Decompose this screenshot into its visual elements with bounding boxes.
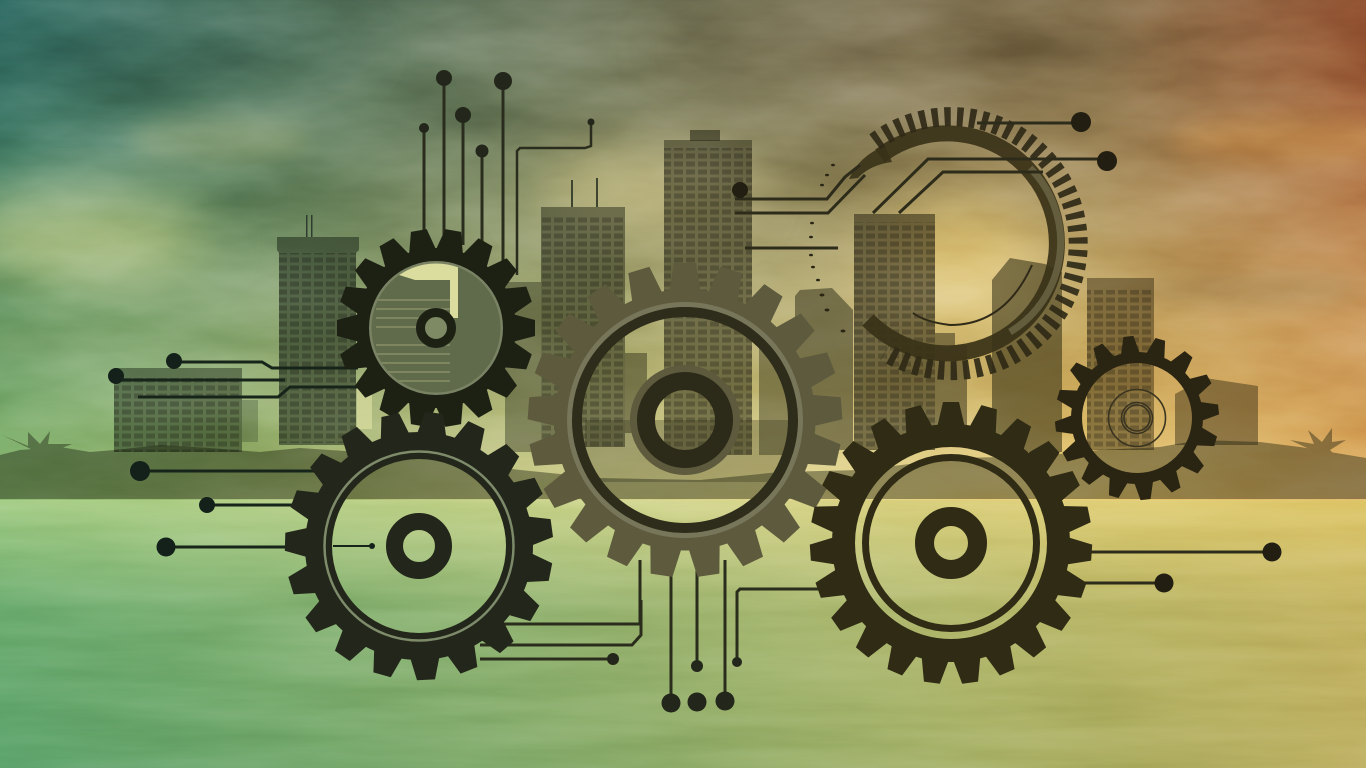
clouds	[0, 0, 1366, 500]
circuit lines: bottom	[480, 560, 840, 703]
lens	[370, 262, 502, 394]
gear	[337, 228, 535, 428]
building: central tower	[664, 130, 752, 455]
building: block in lens	[625, 353, 647, 433]
background sky	[0, 0, 1366, 500]
thin inner arc	[913, 265, 1032, 325]
building: right of central	[759, 345, 795, 455]
circuit lines: right	[735, 123, 1272, 583]
circuit nodes: bottom	[607, 653, 742, 712]
inner ring	[866, 458, 1036, 628]
gear lower right	[809, 402, 1093, 685]
building: small right of left tower	[357, 387, 372, 429]
circuit nodes: right	[732, 112, 1282, 592]
building: left tower	[277, 215, 359, 445]
central gear hub	[642, 377, 728, 463]
central gear teeth	[527, 263, 843, 578]
skyline	[0, 130, 1366, 499]
teeth	[1054, 335, 1220, 501]
building: far right low	[1175, 378, 1258, 445]
gear top left	[337, 228, 535, 428]
central gear inner ring	[577, 312, 793, 528]
small gear right	[1054, 335, 1220, 501]
gear lower left	[285, 411, 554, 681]
building: right centre tower	[854, 214, 967, 450]
thin gear inner light band	[1010, 168, 1061, 332]
concentric hub	[1108, 390, 1166, 446]
dotted marks	[809, 164, 846, 332]
central gear light ring	[570, 304, 800, 536]
circuit nodes: left	[108, 353, 375, 556]
building: podium	[585, 420, 790, 482]
hub	[924, 516, 978, 570]
body	[1076, 358, 1198, 478]
body	[844, 436, 1058, 650]
central gear body	[561, 296, 809, 544]
light ring	[324, 452, 514, 640]
body	[318, 446, 520, 646]
hub	[394, 522, 444, 570]
palm right	[1290, 428, 1346, 460]
circuit lines: top left	[424, 78, 591, 275]
water	[0, 500, 1366, 768]
central gear	[527, 263, 843, 578]
building: pitched tower	[795, 288, 853, 450]
circuit nodes: top left	[419, 70, 594, 158]
thin gear teeth	[875, 117, 1078, 371]
palm left	[2, 431, 72, 460]
thin gear swoosh	[849, 146, 892, 179]
building: behind left gear	[505, 282, 541, 452]
circuit lines: left	[116, 362, 372, 547]
building: low left block	[114, 368, 258, 452]
thin gear ring	[868, 133, 1057, 353]
teeth	[809, 402, 1093, 685]
building: plain tower	[992, 258, 1062, 452]
treeline	[0, 428, 1366, 499]
building: centre left tower	[541, 178, 625, 447]
teeth	[285, 411, 554, 681]
lens rim	[370, 262, 502, 394]
thin gear top right	[809, 117, 1078, 371]
building: far right tower	[1087, 278, 1154, 450]
